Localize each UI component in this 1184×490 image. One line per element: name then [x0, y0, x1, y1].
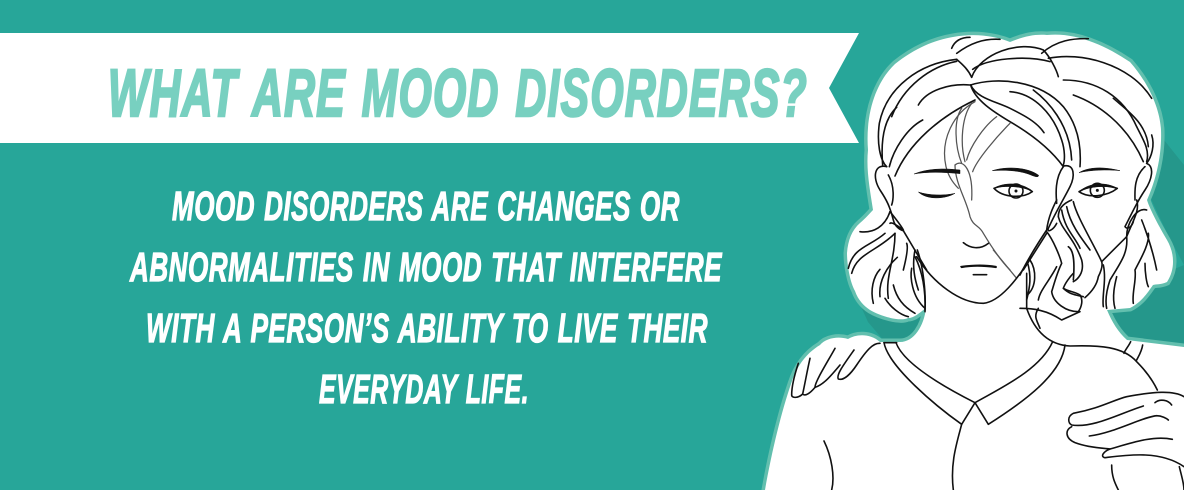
- shadow behind hair: [848, 130, 1184, 347]
- jaw: [903, 231, 927, 270]
- collar: [884, 343, 1065, 424]
- nose and mouth: [963, 243, 988, 248]
- right hair curls: [1020, 200, 1157, 328]
- definition text block: EVERYDAY LIFE.: [319, 366, 529, 412]
- definition text block: [129, 183, 723, 412]
- left hand fingers: [838, 343, 880, 379]
- figure silhouette: [765, 35, 1184, 490]
- shoulder outline: [1027, 273, 1157, 390]
- faces and hair line art: [875, 37, 1153, 270]
- chin and neck: [917, 257, 1032, 303]
- body, collar and hands line art: [792, 250, 1184, 490]
- left hair curls: [848, 212, 925, 317]
- definition text block: MOOD DISORDERS ARE CHANGES OR: [172, 183, 680, 229]
- definition text block: WITH A PERSON’S ABILITY TO LIVE THEIR: [146, 305, 708, 351]
- grey hair strands over face: [945, 102, 1010, 270]
- eyes and brows: [914, 168, 1120, 198]
- title: WHAT ARE MOOD DISORDERS?: [108, 56, 808, 131]
- title banner: [0, 33, 859, 143]
- definition text block: ABNORMALITIES IN MOOD THAT INTERFERE: [129, 244, 723, 290]
- hair outlines: [875, 37, 1153, 270]
- ears: [875, 166, 903, 231]
- right hand fingers: [1069, 392, 1184, 425]
- illustration: two-faced woman with hands on her shoulders: [765, 35, 1184, 490]
